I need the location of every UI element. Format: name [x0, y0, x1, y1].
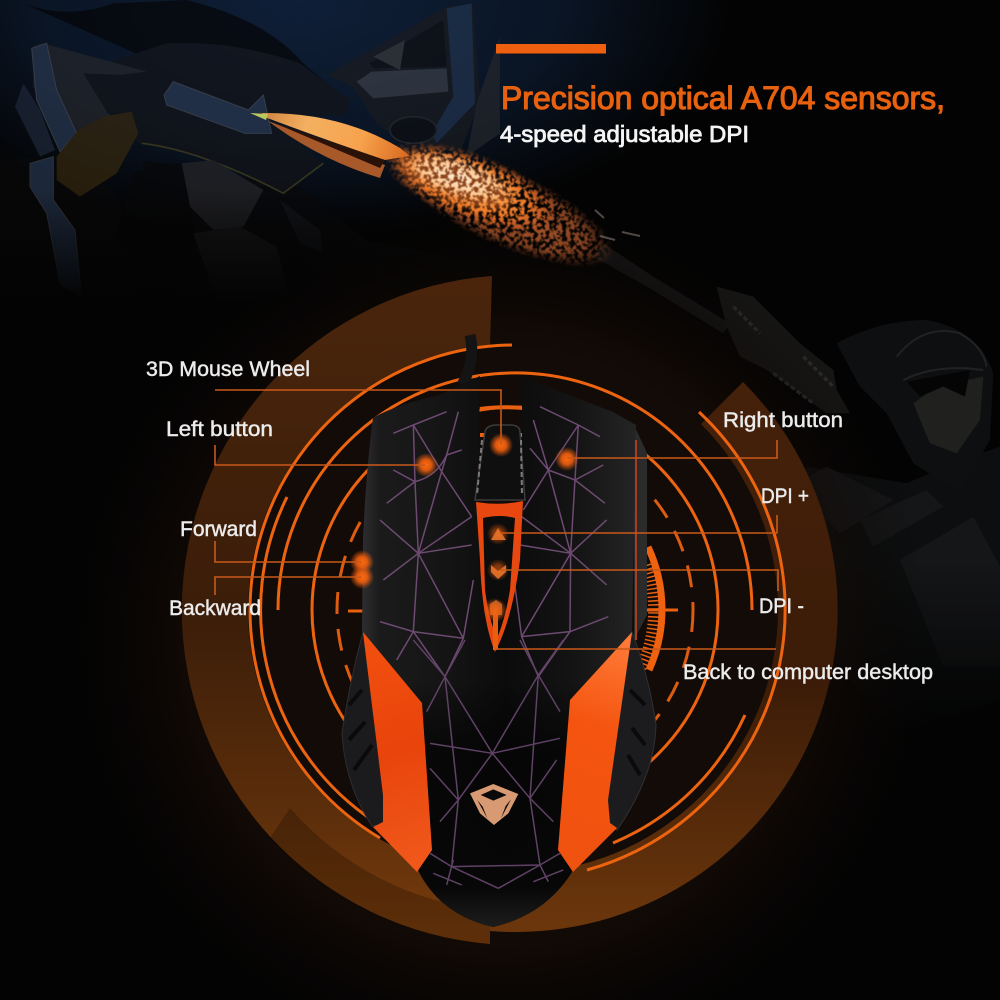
armor inset — [370, 20, 447, 68]
inner disc — [252, 347, 778, 873]
label: back to desktop: Back to computer desktop — [683, 661, 933, 684]
brown band right — [490, 382, 838, 932]
center spindle — [476, 501, 523, 652]
accent bar — [496, 44, 606, 54]
dashed ring — [337, 432, 693, 788]
spindle tip — [493, 612, 498, 650]
web lines lower — [413, 640, 563, 888]
helmet line — [897, 331, 987, 380]
leader lines — [215, 390, 778, 649]
button up — [491, 528, 506, 540]
glove — [57, 112, 138, 197]
button down — [491, 565, 506, 579]
label: left button: Left button — [166, 418, 273, 441]
armor plate — [373, 40, 405, 70]
mouse — [342, 376, 656, 927]
orange rings — [250, 345, 785, 870]
shoulder armor — [327, 3, 480, 153]
armor ring — [390, 117, 437, 143]
hood — [837, 320, 993, 493]
smoke flecks — [595, 210, 640, 240]
hair — [117, 163, 197, 300]
ring marks in channel — [478, 407, 525, 468]
label: wheel: 3D Mouse Wheel — [146, 358, 310, 381]
subtitle: 4-speed adjustable DPI — [500, 121, 749, 147]
crosshair ticks — [348, 610, 678, 611]
soldier straps — [790, 467, 1000, 667]
skull eyes — [907, 370, 970, 397]
label: forward: Forward — [180, 518, 257, 541]
background illustration: rifle and soldier — [593, 243, 1000, 733]
grip ridges — [349, 690, 645, 775]
bullet lower — [268, 121, 385, 178]
label: backward: Backward — [169, 597, 261, 620]
rifle barrel — [593, 243, 730, 333]
desktop button — [490, 600, 502, 615]
darker lower band — [270, 808, 490, 944]
figure fade — [0, 190, 560, 302]
fire glow — [392, 143, 518, 221]
label: dpi minus: DPI - — [759, 595, 804, 618]
left orange panel — [363, 632, 432, 872]
label: right button: Right button — [723, 409, 843, 432]
rifle body — [717, 287, 850, 413]
armor band — [357, 68, 448, 98]
cloak — [0, 157, 500, 300]
web lines upper — [380, 407, 608, 677]
collar — [280, 200, 323, 253]
neck — [193, 227, 290, 300]
title: Precision optical A704 sensors, — [501, 80, 945, 116]
armor left — [33, 43, 147, 157]
sparks — [372, 123, 628, 291]
hat — [80, 43, 350, 193]
explosion — [372, 123, 640, 291]
wheel highlights — [477, 440, 522, 495]
hotspots — [350, 433, 579, 622]
body shading — [362, 376, 636, 927]
right orange panel — [558, 632, 632, 872]
labels — [146, 358, 933, 684]
red side line — [635, 440, 637, 640]
bullet tip — [250, 113, 268, 120]
bullet stripe — [272, 122, 385, 168]
soldier fade — [800, 560, 1000, 740]
side strip — [634, 425, 647, 640]
scroll wheel — [475, 425, 525, 500]
spindle inner — [483, 516, 515, 638]
bullet — [250, 113, 410, 178]
label: dpi plus: DPI + — [761, 485, 809, 508]
bullet upper — [262, 113, 410, 160]
cuff — [30, 157, 82, 297]
soldier torso — [773, 447, 1000, 733]
radar graphic — [182, 276, 838, 944]
thick inner arc — [648, 547, 662, 670]
background illustration: gunslinger — [0, 0, 500, 300]
mouse body — [362, 376, 636, 927]
tick scale — [640, 565, 654, 670]
brown band left — [182, 276, 492, 944]
central glow — [0, 200, 1000, 1000]
hat trim — [78, 72, 323, 193]
left grip — [342, 632, 385, 826]
rifle details — [733, 307, 833, 403]
hat band — [164, 82, 272, 133]
armor edge — [15, 83, 55, 157]
feather — [23, 0, 347, 100]
background sky — [0, 0, 1000, 300]
skull — [913, 377, 983, 453]
armor far — [467, 37, 500, 157]
cable — [462, 335, 472, 385]
right grip — [606, 632, 656, 830]
face — [182, 160, 263, 230]
armor strap — [32, 43, 77, 152]
armor strap right — [432, 3, 475, 143]
logo — [470, 784, 518, 825]
